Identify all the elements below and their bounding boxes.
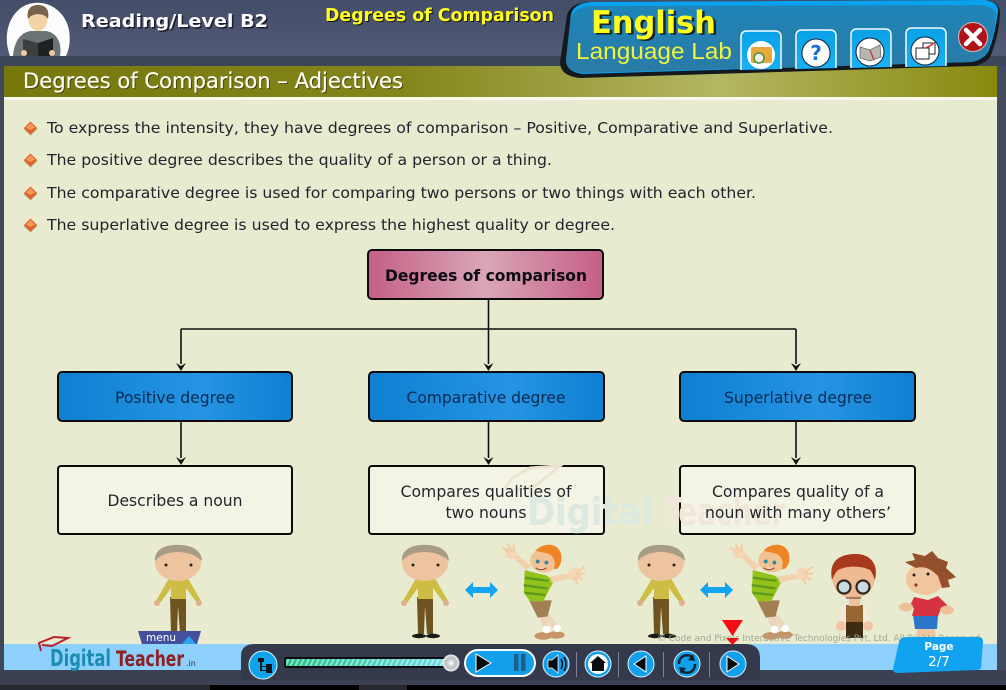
arrow: comparative double bbox=[465, 582, 498, 598]
page counter: 2/7 bbox=[928, 654, 950, 670]
logo: Digital Teacher: Digital bbox=[50, 646, 111, 672]
logo: Digital Teacher bbox=[39, 637, 196, 672]
illustration: superlative man bbox=[637, 545, 685, 638]
illustration: boy with glasses bbox=[831, 554, 876, 638]
content panel bbox=[4, 100, 997, 644]
heading: topic: Degrees of Comparison bbox=[325, 6, 554, 26]
illustration: positive man bbox=[154, 545, 202, 638]
bullet 1: To express the intensity, they have degrees of comparison – Positive, Comparative and Superlative. bbox=[46, 119, 833, 137]
note text: compares many bbox=[705, 482, 891, 522]
heading: level: Reading/Level B2 bbox=[81, 11, 268, 32]
watermark: Digital bbox=[527, 490, 653, 534]
tab: glossary bbox=[851, 29, 891, 68]
illustration: comparative man bbox=[401, 545, 449, 638]
flowchart connectors bbox=[181, 299, 796, 458]
player control bar bbox=[241, 644, 760, 680]
note text: compares many: Compares quality of a bbox=[712, 482, 884, 501]
icon: reader avatar bbox=[7, 3, 70, 56]
box: superlative degree bbox=[680, 372, 915, 421]
icon: previous bbox=[628, 651, 654, 677]
panel: English Language Lab bbox=[560, 0, 1000, 78]
title shadow: Degrees of Comparison – Adjectives bbox=[24, 70, 404, 95]
menu tab: menu bbox=[146, 632, 176, 644]
tab: help: ? bbox=[810, 41, 822, 65]
label: English: English bbox=[591, 5, 716, 41]
note text: compares many: noun with many others’ bbox=[705, 503, 891, 522]
copyright: © Code and Pixels Interactive Technologies Pvt. Ltd. All Rights Reserved. bbox=[657, 634, 983, 644]
title: Degrees of Comparison – Adjectives bbox=[23, 69, 403, 94]
box: superlative degree: Superlative degree bbox=[724, 388, 872, 407]
bullet 4: The superlative degree is used to express the highest quality or degree. bbox=[46, 216, 615, 234]
note box: compares two nouns bbox=[369, 466, 604, 534]
page counter bbox=[893, 637, 983, 673]
arrow: superlative double bbox=[700, 582, 733, 598]
icon: red pointer bbox=[722, 620, 743, 645]
bullet list bbox=[24, 119, 833, 234]
bottom edge bbox=[0, 685, 1006, 690]
header bar bbox=[0, 0, 1006, 56]
tab: help bbox=[796, 30, 836, 69]
bullet 2: The positive degree describes the quality of a person or a thing. bbox=[46, 151, 552, 169]
root box: degrees of comparison bbox=[368, 250, 603, 299]
play and pause control bbox=[465, 650, 535, 676]
page counter: Page bbox=[924, 641, 954, 653]
logo: Digital Teacher: .in bbox=[186, 659, 196, 668]
tab: resize bbox=[906, 28, 946, 67]
box: positive degree: Positive degree bbox=[115, 388, 235, 407]
flowchart arrowheads bbox=[176, 363, 801, 465]
footer strip bbox=[4, 644, 997, 670]
note text: compares two nouns: two nouns bbox=[446, 503, 526, 522]
icon: replay bbox=[674, 651, 700, 677]
tab: history bbox=[741, 31, 781, 70]
watermark bbox=[505, 466, 785, 534]
box: positive degree bbox=[58, 372, 292, 421]
note text: compares two nouns: Compares qualities of bbox=[400, 482, 572, 501]
icon: volume bbox=[543, 651, 569, 677]
box: comparative degree bbox=[369, 372, 604, 421]
illustration: boy in red shirt bbox=[899, 551, 956, 636]
title bar rule bbox=[4, 97, 997, 100]
logo: Digital Teacher: Teacher bbox=[116, 647, 184, 671]
progress bar bbox=[284, 654, 460, 672]
icon: tree menu bbox=[249, 651, 277, 679]
icon: next bbox=[720, 651, 746, 677]
note: describes a noun: Describes a noun bbox=[108, 491, 242, 510]
menu tab bbox=[138, 631, 201, 644]
note: describes a noun bbox=[58, 466, 292, 534]
root box: degrees of comparison: Degrees of comparison bbox=[385, 266, 587, 285]
note box: compares many bbox=[680, 466, 915, 534]
icon: home bbox=[585, 651, 611, 677]
label: Language Lab: Language Lab bbox=[576, 38, 732, 64]
right frame bbox=[997, 66, 1006, 670]
illustration: comparative boy bbox=[502, 544, 585, 640]
button: close bbox=[958, 22, 988, 52]
label: English shadow: English bbox=[594, 6, 718, 42]
watermark: Teacher bbox=[663, 490, 785, 534]
lower frame bbox=[0, 670, 1006, 685]
bullet 3: The comparative degree is used for comparing two persons or two things with each other. bbox=[46, 184, 756, 202]
illustration: superlative boy bbox=[730, 544, 813, 640]
heading: level shadow: Reading/Level B2 bbox=[82, 12, 270, 34]
note text: compares two nouns bbox=[400, 482, 572, 522]
box: comparative degree: Comparative degree bbox=[406, 388, 566, 407]
title bar bbox=[4, 66, 997, 97]
heading: topic shadow: Degrees of Comparison bbox=[326, 7, 555, 27]
